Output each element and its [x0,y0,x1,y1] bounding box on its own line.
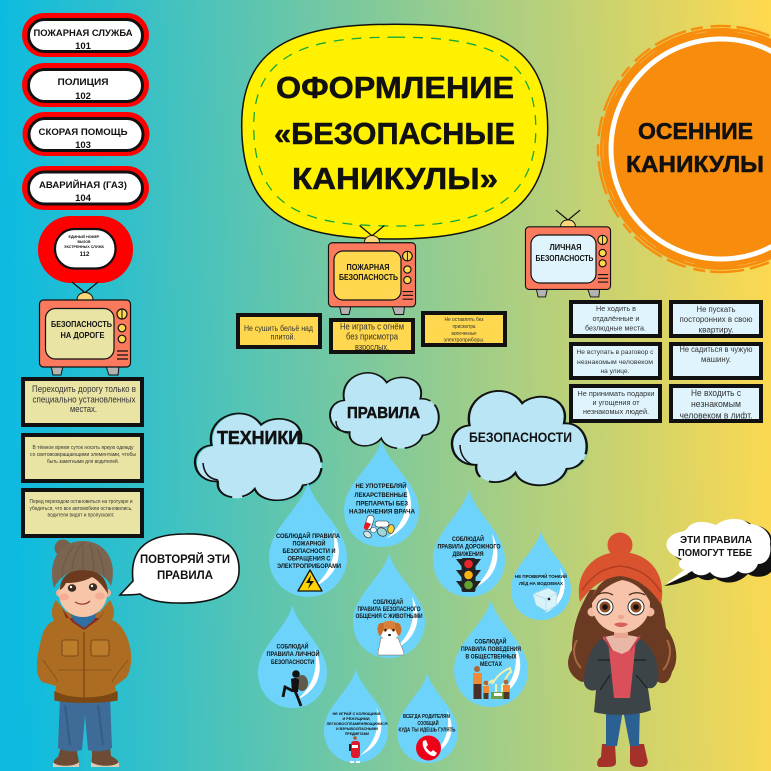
pill: police 102: 102 [75,91,91,102]
hat [54,540,72,556]
TV: road safety [40,282,130,375]
icon: pills [362,514,395,539]
drop: public places: В ОБЩЕСТВЕННЫХ [466,654,517,660]
rule: strange car [671,344,761,378]
rule box 3: включенные [452,331,476,337]
rule: strangers in flat: квартиру. [698,326,734,334]
speech bubble: boy: ПОВТОРЯЙ ЭТИ [140,553,230,566]
rule box 3: электроприборы. [444,338,485,344]
rule: lift [671,386,761,421]
hair back [568,585,676,683]
rule: gifts: и угощения от [592,400,640,407]
pill: ambulance 103: СКОРАЯ ПОМОЩЬ [38,127,128,138]
cloud: ПРАВИЛА: ПРАВИЛА [347,405,420,422]
drop: fire and electric appliances: ЭЛЕКТРОПРИБОРАМИ [277,563,341,570]
rule box 3: Не оставлять без [444,317,484,323]
rule: lift: незнакомым [691,399,741,409]
rule box 2: В тёмное время суток носить яркую одежду [32,445,134,451]
drop: thin ice [511,531,571,620]
icon: puppy [378,621,404,655]
jeans [606,704,640,746]
TV: personal safety [525,210,611,297]
speech bubble: girl: ПОМОГУТ ТЕБЕ [678,548,752,559]
rule box 1 [23,379,142,425]
drop: dangerous items [324,669,388,763]
title text: КАНИКУЛЫ» [292,161,498,196]
speech bubble: girl: ЭТИ ПРАВИЛА [680,535,752,546]
rule box 3: водители видят и пропускают. [48,512,114,518]
autumn holidays label: КАНИКУЛЫ [626,151,764,177]
TV: fire safety antenna and set: БЕЗОПАСНОСТЬ [339,273,398,282]
drop: fire and electric appliances [269,482,347,597]
panel: fire safety rules [238,313,505,352]
rule box 1 [238,315,320,347]
face [68,584,76,592]
pill: gas emergency 104: АВАРИЙНАЯ (ГАЗ) [39,179,127,191]
TV: road safety: НА ДОРОГЕ [60,330,105,340]
pill: unified number 112: ЕДИНЫЙ НОМЕР [68,235,100,239]
rule: strange car: Не садиться в чужую [680,345,752,354]
jeans [58,696,112,751]
TV: fire safety antenna and set: ПОЖАРНАЯ [346,263,390,272]
title blob [242,24,548,239]
hood and collar [52,600,114,632]
TV: personal safety: ЛИЧНАЯ [550,243,582,252]
rule: strangers in flat [671,302,761,336]
drop: public places: МЕСТАХ [480,661,503,668]
panel: emergency numbers [22,13,150,283]
rule: gifts [571,386,660,421]
icon: museum visit [473,666,511,699]
rule: talking to strangers [571,344,660,378]
drop: public places: СОБЛЮДАЙ [474,636,507,646]
cloud: ТЕХНИКИ [195,413,323,502]
panel: road safety rules [23,379,142,536]
pill: gas emergency 104 [22,166,149,210]
rule: strangers in flat: посторонних в свою [680,315,752,324]
pill: fire service 101: ПОЖАРНАЯ СЛУЖБА [34,28,133,39]
drop: thin ice: НЕ ПРОВЕРЯЙ ТОНКИЙ [515,572,568,580]
rule box 3: убедиться, что все автомобили остановились, [30,506,132,512]
cloud: БЕЗОПАСНОСТИ: БЕЗОПАСНОСТИ [469,430,572,445]
pill: unified number 112: ЭКСТРЕННЫХ СЛУЖБ [64,245,104,249]
drop: medicines: НАЗНАЧЕНИЯ ВРАЧА [349,508,415,516]
drop: tell parents: ВСЕГДА РОДИТЕЛЯМ [403,714,450,720]
drop: medicines [344,440,419,547]
eyes [597,599,613,615]
rule box 1: специально установленных [32,394,136,404]
drop: medicines: ПРЕПАРАТЫ БЕЗ [356,500,408,508]
rule box 1: Не сушить бельё над [244,324,313,333]
TV: personal safety: БЕЗОПАСНОСТЬ [536,254,594,263]
pill: fire service 101: 101 [75,41,92,52]
drop: tell parents: СООБЩАЙ [418,719,439,727]
title text [274,70,515,196]
rule box 3 [423,313,505,345]
drop: dangerous items: ЛЕГКОВОСПЛАМЕНЯЮЩИМИСЯ [326,721,388,726]
rule box 1: местах. [70,404,97,414]
rule box 2: Не играть с огнём [340,322,404,332]
speech bubble: girl [664,519,771,586]
drop: public places: ПРАВИЛА ПОВЕДЕНИЯ [461,646,521,653]
rule box 3: Перед переходом остановиться на тротуаре и [30,499,133,505]
drop: traffic rules: СОБЛЮДАЙ [452,535,484,543]
title text: «БЕЗОПАСНЫЕ [274,116,515,151]
pill: unified number 112 [38,216,133,283]
rule: lift: Не входить с [691,388,741,398]
hoodie [608,640,636,698]
pill: police 102 [22,63,149,107]
rule: strange car: машину. [701,355,731,364]
drop: fire and electric appliances: СОБЛЮДАЙ ПРАВИЛА [276,531,340,540]
panel: orange autumn holidays circle [598,26,771,272]
drop: animals: ОБЩЕНИЯ С ЖИВОТНЫМИ [356,614,422,620]
drop: animals: ПРАВИЛА БЕЗОПАСНОГО [358,607,421,613]
head [56,589,64,597]
drop: dangerous items: И РЕЖУЩИМИ, [342,716,370,721]
TV: fire safety antenna and set [328,226,416,314]
rule: talking to strangers: незнакомым человеком [577,359,653,366]
cloud: БЕЗОПАСНОСТИ [452,391,589,486]
cloud: ТЕХНИКИ: ТЕХНИКИ [217,428,301,448]
drop: thin ice: ЛЁД НА ВОДОЕМАХ [519,580,564,587]
icon: phone [416,736,441,760]
drop: public places [454,600,528,707]
panel: rule drops [258,440,571,763]
drop: tell parents: КУДА ТЫ ИДЕШЬ ГУЛЯТЬ [398,728,456,734]
pill: fire service 101 [22,13,149,57]
panel: personal safety rules [571,302,761,421]
drop: fire and electric appliances: БЕЗОПАСНОСТИ И [282,548,336,555]
pill: unified number 112: ВЫЗОВ [78,240,91,244]
drop: fire and electric appliances: ОБРАЩЕНИЯ С [288,556,331,562]
hat [608,532,632,558]
drop: traffic rules [433,489,505,597]
drop: tell parents [397,673,458,763]
rule box 1: Переходить дорогу только в [32,384,136,394]
rule: lift: человеком в лифт. [680,410,752,420]
drop: dangerous items: И ВЗРЫВООПАСНЫМИ [336,726,378,731]
icon: ice cube [533,588,557,611]
autumn holidays label [626,118,764,177]
rule: remote places: отдалённые и [592,314,640,323]
drop: traffic rules: ДВИЖЕНИЯ [452,551,484,558]
cloud: ПРАВИЛА [330,373,440,449]
TV: road safety: БЕЗОПАСНОСТЬ [51,319,112,329]
rule box 2: быть заметными для водителей. [47,458,119,465]
rule: gifts: незнакомых людей. [583,408,649,416]
icon: fire extinguisher character [349,736,360,762]
pill: gas emergency 104: 104 [75,193,92,204]
shoes [53,747,119,767]
neck and face [614,628,628,638]
pill: ambulance 103: 103 [75,140,91,151]
drop: animals: СОБЛЮДАЙ [373,598,403,606]
rule box 2 [331,320,413,352]
rule box 2: со световозвращающими элементами, чтобы [30,452,136,458]
rule box 3: присмотра [452,324,476,330]
rule box 2 [23,435,142,481]
jacket [37,614,131,701]
drop: personal safety [258,605,327,708]
drop: dangerous items: ПРЕДМЕТАМИ [345,731,369,736]
rule: gifts: Не принимать подарки [578,391,655,398]
pill: police 102: ПОЛИЦИЯ [58,77,109,88]
character: girl [568,532,676,767]
drop: medicines: ЛЕКАРСТВЕННЫЕ [354,492,408,499]
boots [597,744,648,767]
rule box 2: взрослых. [355,342,389,352]
rule: talking to strangers: на улице. [600,368,630,375]
rule: remote places [571,302,660,336]
icon: thief with a bag [283,670,308,706]
drop: personal safety: СОБЛЮДАЙ [276,642,309,650]
rule: talking to strangers: Не вступать в разговор с [576,349,654,356]
drop: animals [353,553,425,658]
rule: strangers in flat: Не пускать [696,305,736,314]
jacket [584,637,659,715]
character: boy [37,540,131,767]
pill: unified number 112: 112 [80,252,90,258]
pill: ambulance 103 [22,112,150,156]
icon: traffic light [456,558,481,592]
autumn holidays label: ОСЕННИЕ [638,118,753,144]
rule box 3 [23,490,142,536]
rule: remote places: Не ходить в [596,304,636,313]
drop: personal safety: БЕЗОПАСНОСТИ [271,659,314,666]
rule box 2: без присмотра [346,332,398,342]
icon: high voltage sign [298,570,322,591]
rule: remote places: безлюдные места. [585,324,646,332]
speech bubble: boy: ПРАВИЛА [157,570,213,582]
drop: personal safety: ПРАВИЛА ЛИЧНОЙ [266,649,320,658]
speech bubble: boy [120,534,239,603]
drop: medicines: НЕ УПОТРЕБЛЯЙ [356,481,407,490]
title text: ОФОРМЛЕНИЕ [276,70,514,105]
rule box 1: плитой. [270,332,296,342]
drop: dangerous items: НЕ ИГРАЙ С КОЛЮЩИМИ [332,711,381,716]
drop: fire and electric appliances: ПОЖАРНОЙ [292,538,326,548]
drop: traffic rules: ПРАВИЛА ДОРОЖНОГО [438,544,501,550]
